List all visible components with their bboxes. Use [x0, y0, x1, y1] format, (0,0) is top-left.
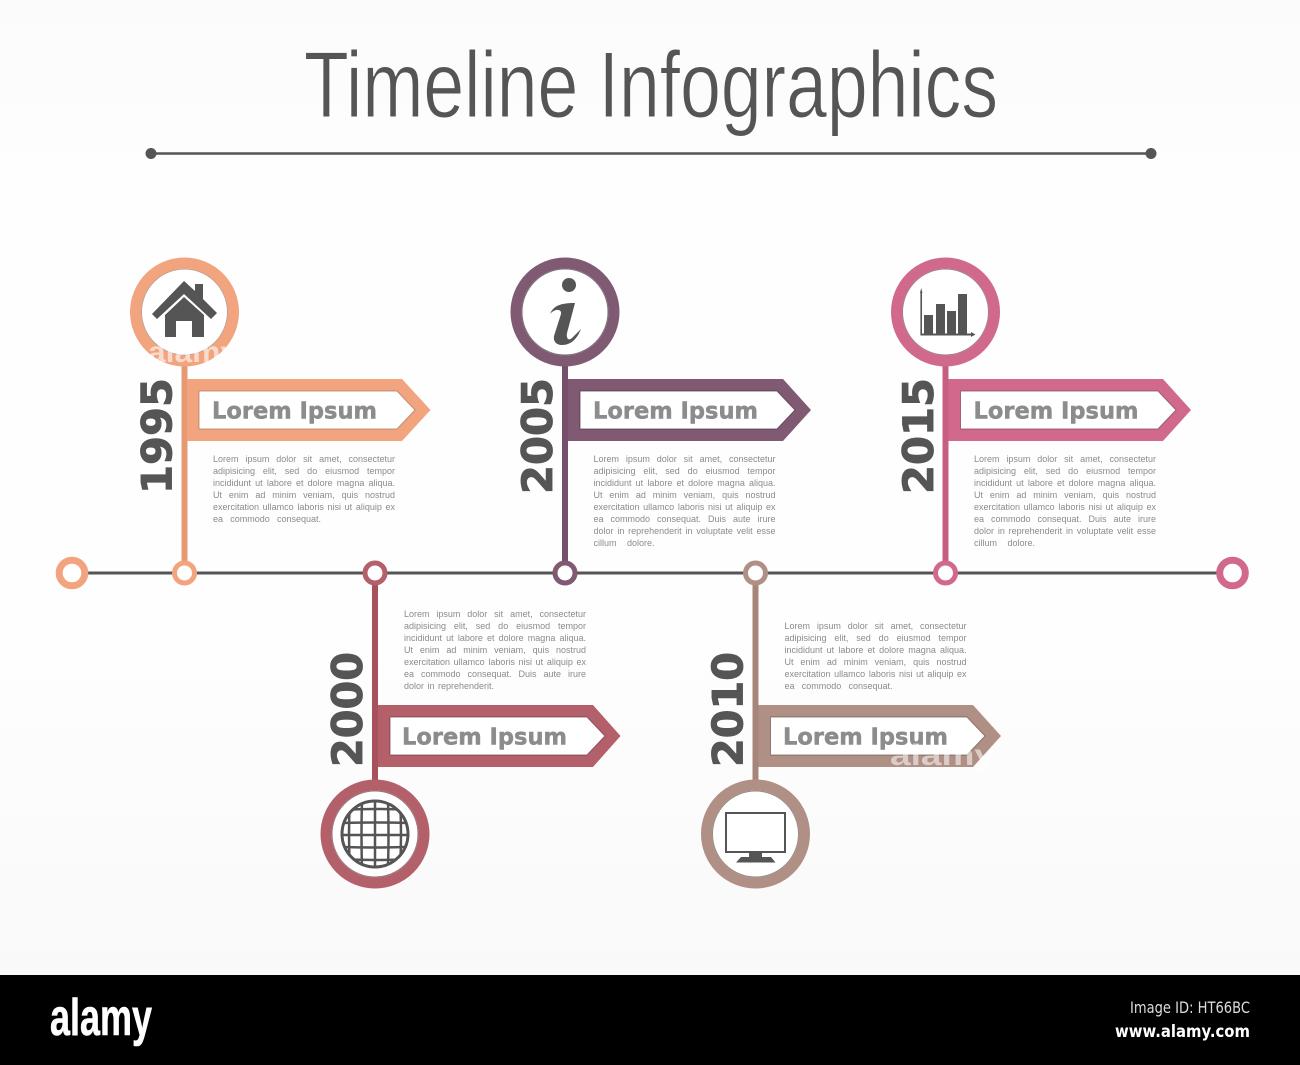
description text: dolor in reprehenderit in voluptate velit esse: [594, 526, 776, 536]
flag label: Lorem Ipsum: [402, 724, 567, 750]
description text: exercitation ullamco laboris nisi ut aliquip ex: [404, 657, 586, 667]
description text: [974, 453, 1164, 553]
description text: ea commodo consequat.: [213, 514, 321, 524]
description text: adipisicing elit, sed do eiusmod tempor: [594, 466, 776, 476]
year: 2015: 2015: [894, 378, 943, 494]
description text: Lorem ipsum dolor sit amet, consectetur: [404, 609, 586, 619]
flag: 2005: [568, 379, 811, 441]
icon: house: [152, 281, 217, 337]
description text: [213, 453, 403, 529]
description text: Ut enim ad minim veniam, quis nostrud: [594, 490, 776, 500]
year: 2010: 2010: [704, 652, 752, 767]
flag: 2000: [378, 705, 620, 767]
description text: ea commodo consequat. Duis aute irure: [974, 514, 1156, 524]
title divider line: [146, 148, 1156, 159]
description text: incididunt ut labore et dolore magna aliqua.: [404, 633, 586, 643]
flag label: Lorem Ipsum: [212, 398, 377, 424]
description text: Ut enim ad minim veniam, quis nostrud: [974, 490, 1156, 500]
flag label: Lorem Ipsum: [593, 398, 758, 424]
year: 2000: 2000: [323, 652, 372, 767]
flag: 2015: [948, 379, 1191, 441]
description text: adipisicing elit, sed do eiusmod tempor: [784, 633, 966, 643]
description text: incididunt ut labore et dolore magna aliqua.: [213, 478, 395, 488]
description text: dolor in reprehenderit in voluptate velit esse: [974, 526, 1156, 536]
description text: exercitation ullamco laboris nisi ut aliquip ex: [784, 669, 966, 679]
panel: 1995: [132, 263, 430, 583]
description text: exercitation ullamco laboris nisi ut aliquip ex: [594, 502, 776, 512]
description text: Lorem ipsum dolor sit amet, consectetur: [974, 454, 1156, 464]
description text: [404, 608, 594, 696]
description text: cillum dolore.: [594, 538, 654, 548]
description text: Ut enim ad minim veniam, quis nostrud: [784, 657, 966, 667]
watermark fragment: alamy: [890, 739, 995, 772]
footer logo: alamy: [50, 989, 152, 1047]
image id: Image ID: HT66BC: [1130, 998, 1250, 1017]
flag: 2010: [758, 705, 1001, 767]
description text: [594, 453, 784, 553]
year: 1995: 1995: [132, 378, 182, 494]
icon: bar chart: [920, 288, 976, 337]
description text: incididunt ut labore et dolore magna aliqua.: [974, 478, 1156, 488]
flag label: Lorem Ipsum: [783, 724, 948, 750]
icon: globe: [340, 800, 410, 868]
flag label: Lorem Ipsum: [974, 398, 1138, 424]
description text: adipisicing elit, sed do eiusmod tempor: [404, 621, 586, 631]
description text: Ut enim ad minim veniam, quis nostrud: [404, 645, 586, 655]
description text: ea commodo consequat. Duis aute irure: [404, 669, 586, 679]
title: Timeline Infographics: [304, 32, 998, 137]
description text: Lorem ipsum dolor sit amet, consectetur: [784, 621, 966, 631]
description text: exercitation ullamco laboris nisi ut aliquip ex: [213, 502, 395, 512]
panel: 2000: [323, 563, 620, 883]
timeline axis: [59, 560, 1245, 586]
description text: [784, 620, 974, 696]
description text: Lorem ipsum dolor sit amet, consectetur: [213, 454, 395, 464]
description text: ea commodo consequat. Duis aute irure: [594, 514, 776, 524]
description text: Ut enim ad minim veniam, quis nostrud: [213, 490, 395, 500]
panel: 2010: [704, 563, 1001, 883]
website: www.alamy.com: [1115, 1022, 1250, 1042]
description text: Lorem ipsum dolor sit amet, consectetur: [594, 454, 776, 464]
panel: 2015: [894, 263, 1191, 583]
description text: cillum dolore.: [974, 538, 1035, 548]
description text: adipisicing elit, sed do eiusmod tempor: [213, 466, 395, 476]
flag: 1995: [187, 379, 430, 441]
watermark fragment: alamy: [148, 336, 238, 369]
description text: ea commodo consequat.: [784, 681, 892, 691]
year: 2005: 2005: [513, 378, 562, 494]
icon: monitor: [726, 813, 785, 862]
icon: information: [550, 278, 581, 345]
description text: adipisicing elit, sed do eiusmod tempor: [974, 466, 1156, 476]
description text: dolor in reprehenderit.: [404, 681, 494, 691]
description text: incididunt ut labore et dolore magna aliqua.: [784, 645, 966, 655]
description text: incididunt ut labore et dolore magna aliqua.: [594, 478, 776, 488]
footer bar: [0, 975, 1300, 1065]
panel: 2005: [513, 263, 811, 583]
description text: exercitation ullamco laboris nisi ut aliquip ex: [974, 502, 1156, 512]
